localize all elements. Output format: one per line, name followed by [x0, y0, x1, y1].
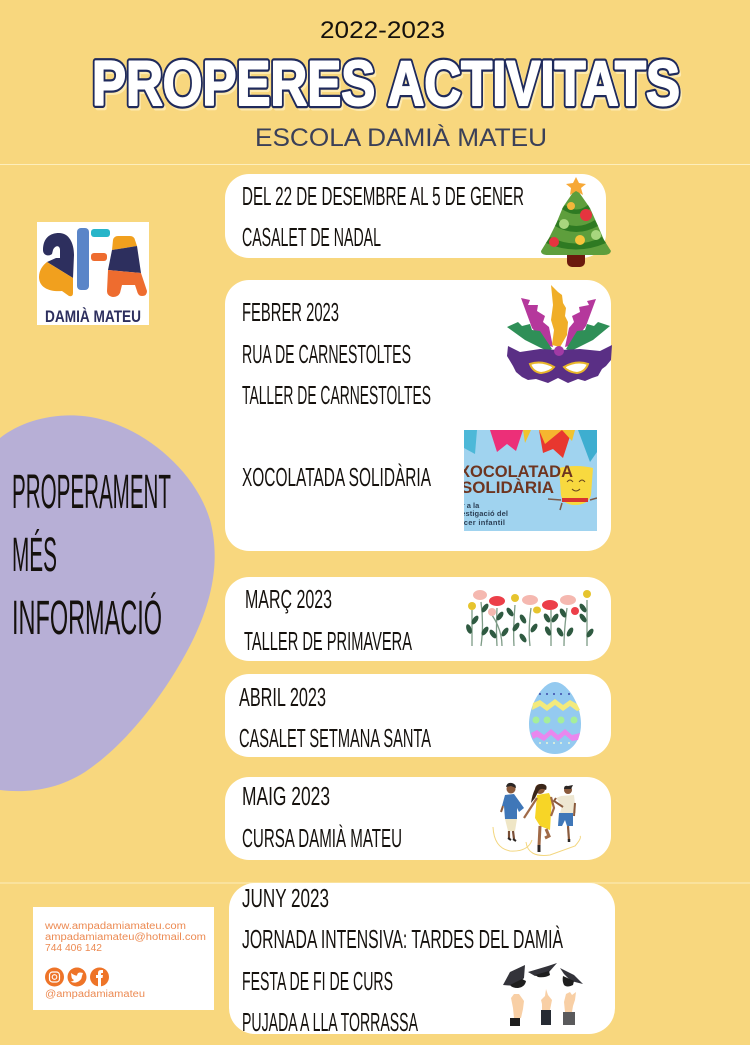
subtitle: ESCOLA DAMIÀ MATEU [255, 123, 547, 152]
image: xocolatada solidària poster: investigació del [450, 509, 508, 518]
purple blob [0, 415, 215, 791]
panel: maig 2023: MAIG 2023 [242, 781, 330, 811]
panel: properament més informació: INFORMACIÓ [12, 591, 162, 645]
image: xocolatada solidària poster: XOCOLATADA [459, 462, 573, 481]
icon: carnival mask [507, 285, 612, 383]
icon: easter egg [529, 682, 581, 754]
boy right [554, 785, 576, 842]
icon: facebook [90, 968, 109, 986]
panel: juny 2023: FESTA DE FI DE CURS [242, 966, 393, 996]
panel: abril 2023 [225, 674, 611, 757]
panel: maig 2023 [225, 777, 611, 860]
logo: AFA Damià Mateu: DAMIÀ MATEU [45, 307, 141, 326]
icon: christmas tree [541, 177, 611, 267]
panel: febrer 2023: XOCOLATADA SOLIDÀRIA [242, 462, 431, 492]
panel: contact details: ampadamiamateu@hotmail.com [45, 932, 206, 943]
panel: casalet de nadal [225, 174, 611, 267]
panel: febrer 2023 [225, 280, 612, 551]
panel: properament més informació: PROPERAMENT [12, 466, 171, 519]
panel: abril 2023: CASALET SETMANA SANTA [239, 723, 431, 753]
icon: flowers [465, 590, 595, 646]
icon: twitter [68, 968, 86, 986]
image: xocolatada solidària poster: SOLIDÀRIA [461, 478, 554, 497]
panel: juny 2023 [229, 883, 615, 1037]
panel: febrer 2023: RUA DE CARNESTOLTES [242, 339, 411, 369]
panel: juny 2023: JUNY 2023 [242, 883, 329, 913]
panel: casalet de nadal: CASALET DE NADAL [242, 222, 381, 252]
panel: maig 2023: CURSA DAMIÀ MATEU [242, 823, 402, 853]
panel: febrer 2023: TALLER DE CARNESTOLTES [242, 380, 431, 410]
panel: març 2023: TALLER DE PRIMAVERA [244, 626, 412, 656]
panel: contact details: www.ampadamiamateu.com [44, 921, 186, 932]
image: xocolatada solidària poster: càncer infantil [450, 518, 505, 527]
panel: contact details: @ampadamiamateu [45, 989, 145, 1000]
girl centre [524, 784, 554, 852]
panel: juny 2023: PUJADA A LLA TORRASSA [242, 1007, 418, 1037]
boy left [501, 783, 524, 841]
year label: 2022-2023 [320, 17, 445, 44]
icon: running children [493, 783, 580, 855]
panel: casalet de nadal: DEL 22 DE DESEMBRE AL 5 DE GENER [242, 181, 524, 211]
icon: graduation caps and hands [503, 963, 583, 1026]
icon: instagram [45, 968, 64, 986]
panel: març 2023: MARÇ 2023 [245, 584, 332, 614]
image: xocolatada solidària poster: per a la [453, 501, 480, 510]
panel: abril 2023: ABRIL 2023 [239, 682, 326, 712]
image: xocolatada solidària poster [450, 430, 597, 531]
logo: AFA Damià Mateu [37, 222, 149, 326]
panel: contact details: 744 406 142 [45, 943, 102, 954]
panel: properament més informació [0, 415, 215, 791]
panel: març 2023 [225, 577, 611, 661]
panel: febrer 2023: FEBRER 2023 [242, 297, 339, 327]
panel: properament més informació: MÉS [12, 529, 57, 582]
panel: contact details [33, 907, 214, 1010]
